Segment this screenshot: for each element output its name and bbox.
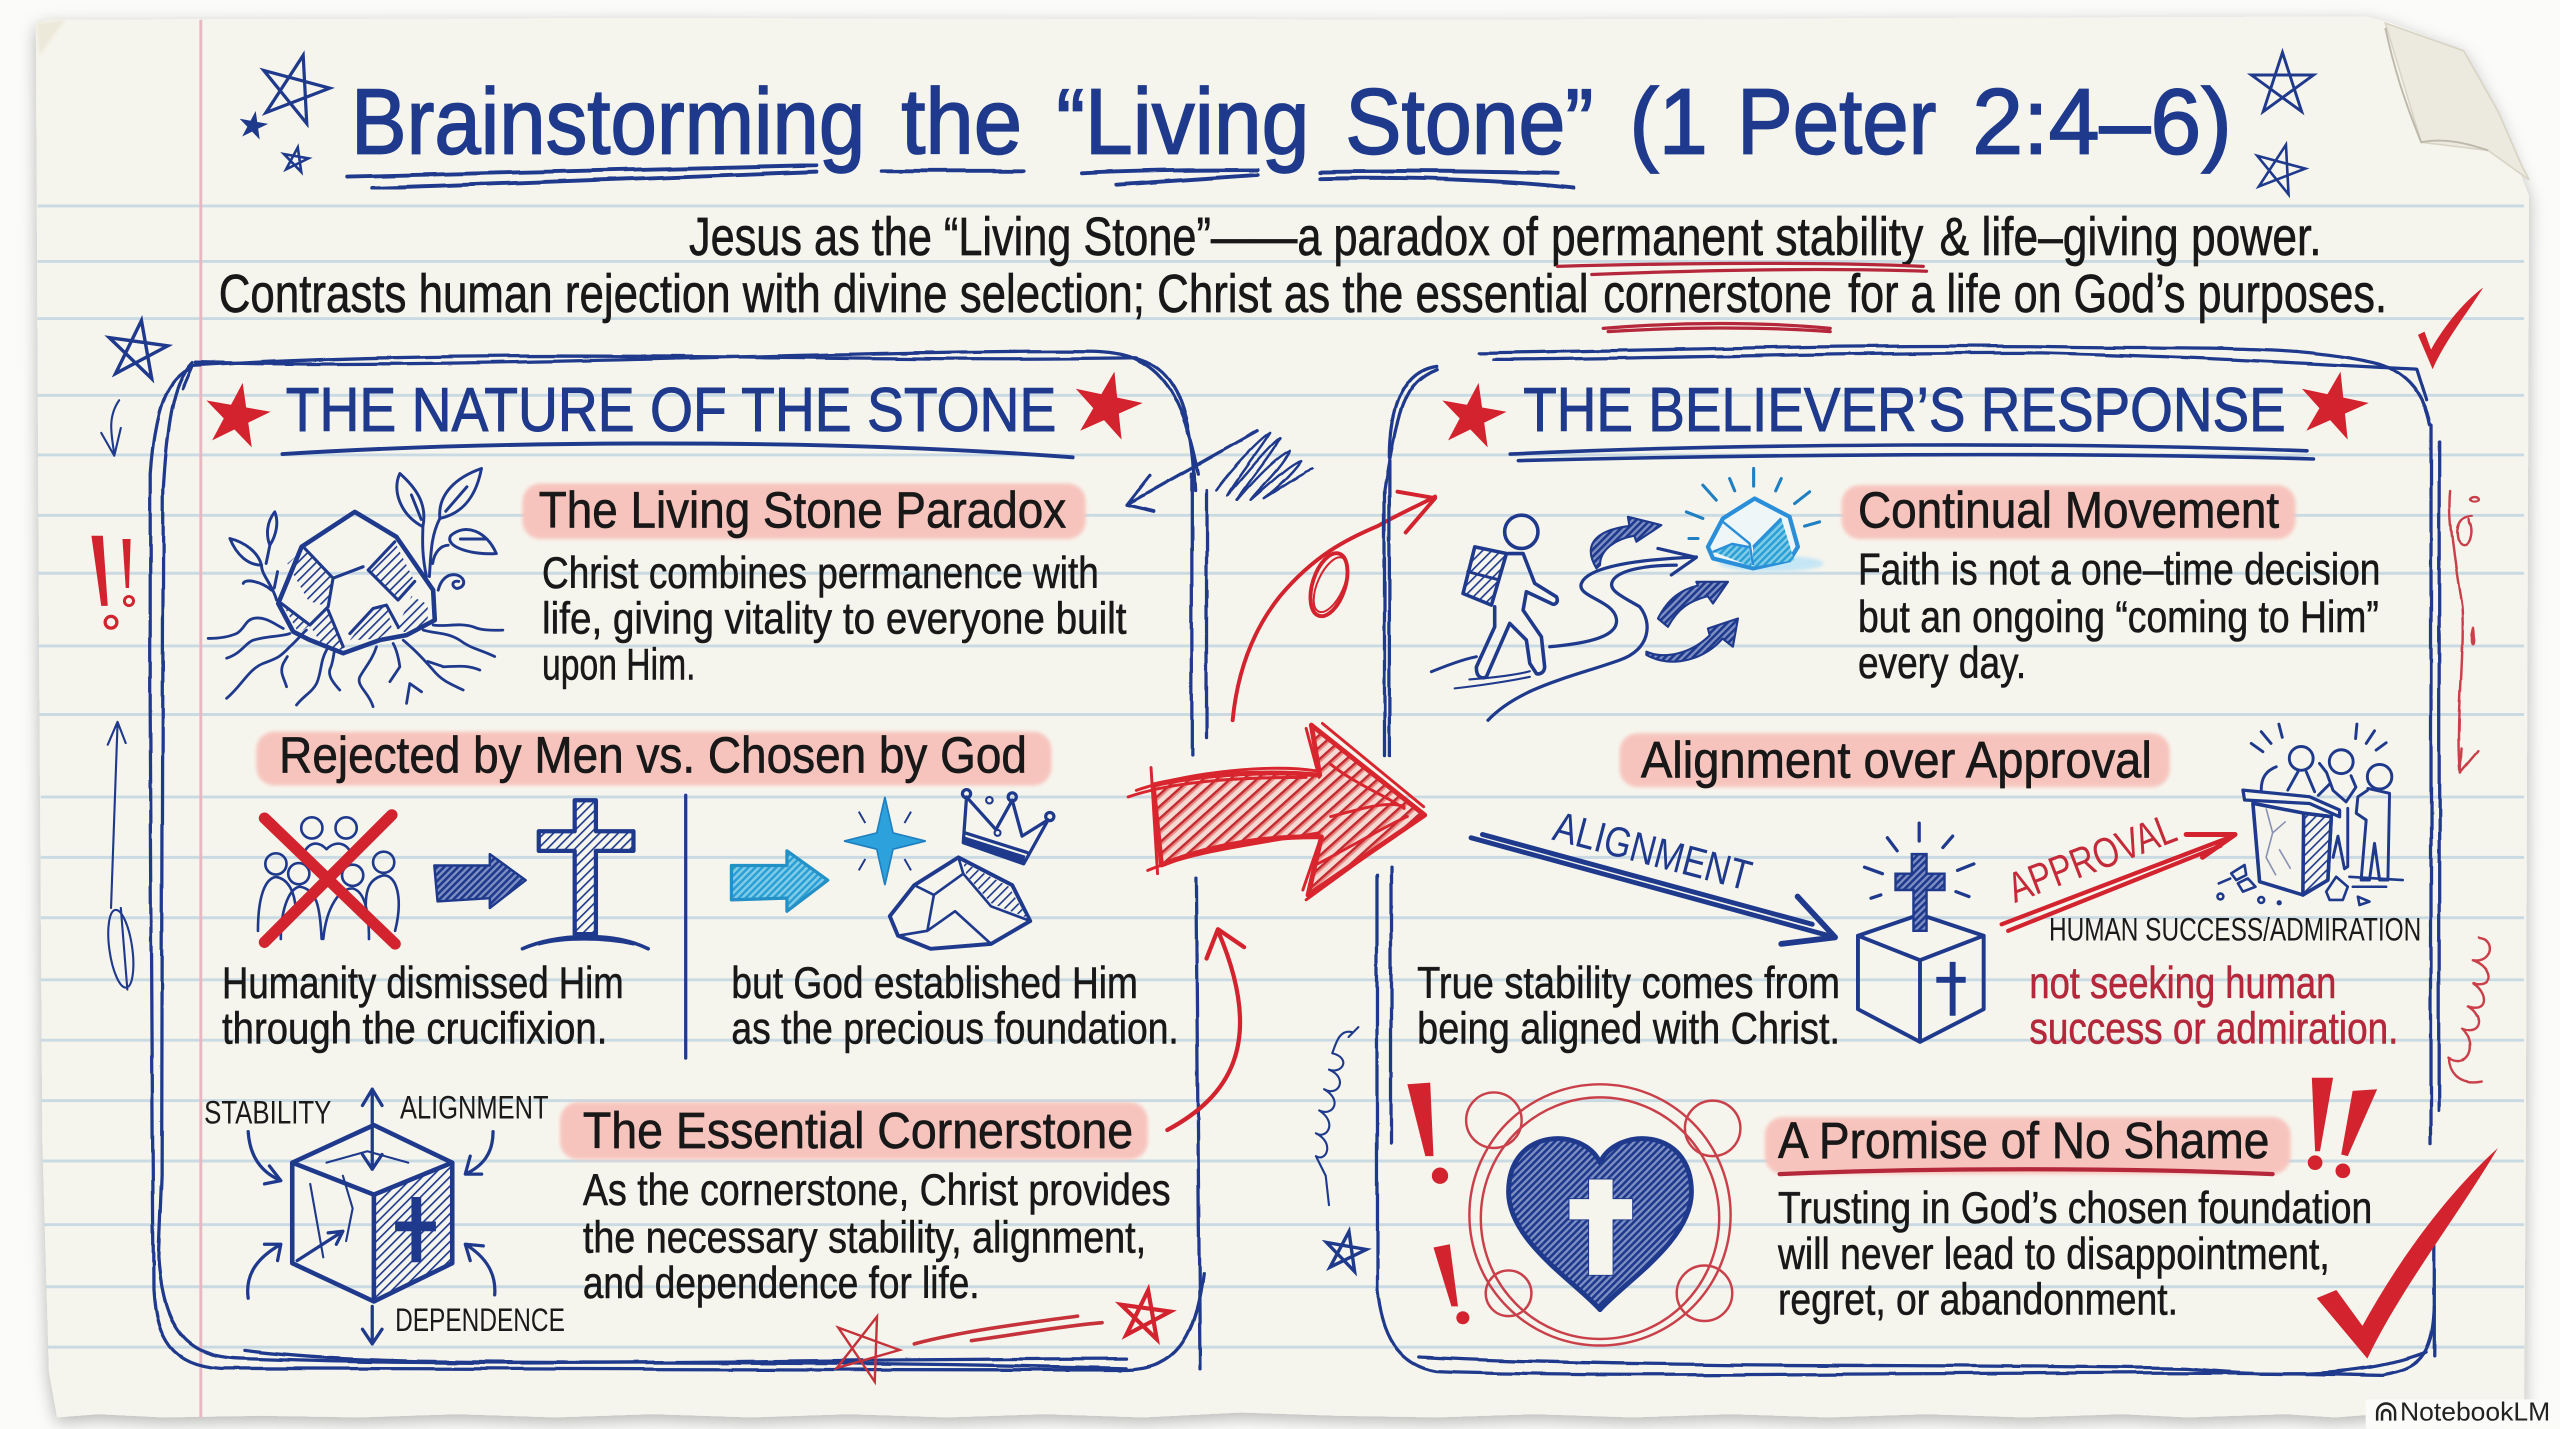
text: continual movement body: Faith is not a one–time decision: [1858, 546, 2380, 595]
arrow: blue pointer with scribble: [1127, 431, 1313, 511]
icon: heart with cross in red rings: [1466, 1084, 1740, 1346]
heading: rejected by men vs chosen by god: Rejected by Men vs. Chosen by God: [279, 726, 1027, 783]
heading: promise of no shame: A Promise of No Shame: [1778, 1112, 2269, 1169]
text: god established: but God established Him: [731, 959, 1138, 1008]
heading: essential cornerstone: The Essential Cornerstone: [583, 1102, 1133, 1159]
icon: crowned stone: [890, 790, 1054, 949]
text: humanity dismissed: Humanity dismissed Him: [222, 959, 624, 1008]
text: promise body: regret, or abandonment.: [1778, 1275, 2178, 1324]
title: “Living: [1056, 70, 1309, 174]
arrow: alignment with label: ALIGNMENT: [1549, 803, 1756, 899]
icon: crumbling podium and admiring crowd: [2217, 724, 2403, 905]
icon: walker with paths toward glowing stone: [1431, 468, 1824, 720]
text: not seeking human success: success or admiration.: [2029, 1004, 2398, 1053]
panel frame: nature of the stone: [150, 351, 1207, 1370]
icon: small red check mark: [2418, 288, 2483, 369]
doodle: blue squiggle and star between panels: [1316, 1027, 1369, 1273]
subtitle: & life–giving power.: [1940, 207, 2322, 267]
text: true stability: being aligned with Christ.: [1417, 1004, 1840, 1053]
title: Brainstorming: [351, 70, 865, 174]
text: god established: [731, 959, 1179, 1053]
text: continual movement body: but an ongoing “coming to Him”: [1858, 593, 2379, 642]
text: god established: as the precious foundation.: [731, 1004, 1179, 1053]
subtitle red underlines: [1558, 263, 1927, 332]
icon: rejected crowd crossed out: [258, 815, 399, 944]
subtitle: Jesus as the “Living Stone”——a paradox of: [689, 207, 1539, 267]
title: (1: [1629, 70, 1708, 174]
title: 2:4–6): [1972, 70, 2232, 174]
text: true stability: [1417, 959, 1840, 1053]
text: living stone paradox body: life, giving vitality to everyone built: [542, 595, 1127, 644]
icon: red exclamation marks: [1407, 1078, 2377, 1324]
icon: cornerstone cube with labelled arrows: [204, 1089, 565, 1344]
arrow: approval with label: APPROVAL: [2001, 804, 2183, 911]
icon: cornerstone cube with labelled arrows: DEPENDENCE: [395, 1301, 565, 1338]
icon: cornerstone cube with labelled arrows: STABILITY: [204, 1093, 332, 1130]
left margin doodles: [91, 316, 171, 990]
icon: cross: [522, 800, 648, 949]
icon: cube with cross: [1858, 823, 1984, 1042]
page curl top right: [2385, 23, 2529, 180]
arrow: red curved bottom: [1167, 929, 1244, 1130]
heading: continual movement: Continual Movement: [1858, 482, 2279, 539]
divider: [685, 795, 687, 1058]
subtitle: permanent stability: [1551, 207, 1923, 267]
text: promise body: [1777, 1184, 2372, 1324]
icon: cornerstone cube with labelled arrows: ALIGNMENT: [400, 1089, 549, 1126]
arrow: big red transition arrow: [1128, 723, 1425, 900]
subtitle: for a life on God’s purposes.: [1848, 264, 2387, 324]
text: cornerstone body: As the cornerstone, Christ provides: [583, 1166, 1171, 1215]
title stars: [239, 46, 2314, 197]
subtitle: [219, 207, 2387, 324]
heading: alignment over approval: Alignment over Approval: [1641, 731, 2152, 788]
text: living stone paradox body: [542, 549, 1127, 689]
panel heading: the nature of the stone: THE NATURE OF THE STONE: [286, 376, 1056, 445]
arrow: alignment with label: [1471, 803, 1835, 944]
label: human success: HUMAN SUCCESS/ADMIRATION: [2049, 911, 2421, 948]
text: living stone paradox body: Christ combines permanence with: [542, 549, 1099, 598]
panel heading: the nature of the stone: [202, 366, 1146, 457]
text: cornerstone body: [583, 1166, 1171, 1308]
text: promise body: will never lead to disappointment,: [1777, 1230, 2330, 1279]
doodle: right margin red squiggles: [2449, 490, 2489, 1082]
text: cornerstone body: the necessary stability, alignment,: [583, 1213, 1146, 1262]
text: not seeking human success: not seeking human: [2029, 959, 2336, 1008]
panel heading: the believer's response: [1437, 366, 2372, 461]
text: humanity dismissed: [222, 959, 624, 1053]
text: not seeking human success: [2029, 959, 2398, 1053]
subtitle: Contrasts human rejection with divine selection; Christ as the essential: [219, 264, 1589, 324]
text: living stone paradox body: upon Him.: [542, 640, 696, 689]
section highlight: living stone paradox: The Living Stone Paradox: [539, 482, 1066, 539]
decorative red stars bottom left panel: [825, 1287, 1173, 1386]
icon: stone with plants and roots: [208, 468, 503, 707]
icon: blue sparkle: [844, 797, 926, 885]
arrow: light blue hatched: [731, 851, 828, 911]
text: cornerstone body: and dependence for life.: [583, 1259, 980, 1308]
text: promise body: Trusting in God’s chosen foundation: [1778, 1184, 2372, 1233]
text: continual movement body: [1858, 546, 2380, 688]
NotebookLM watermark: NotebookLM: [2400, 1397, 2550, 1427]
text: continual movement body: every day.: [1858, 639, 2026, 688]
title underlines: [348, 165, 1574, 188]
panel frame: believer's response: [1377, 346, 2439, 1375]
text: humanity dismissed: through the crucifixion.: [222, 1004, 607, 1053]
title: the: [901, 70, 1022, 174]
arrow: red curved top with loop: [1233, 492, 1435, 720]
text: true stability: True stability comes from: [1417, 959, 1840, 1008]
arrow: dark blue hatched: [434, 854, 526, 908]
title: Peter: [1737, 70, 1936, 174]
title: [351, 70, 2232, 174]
icon: large red check mark: [2317, 1148, 2498, 1359]
title: Stone”: [1345, 70, 1593, 174]
panel heading: the believer's response: THE BELIEVER’S RESPONSE: [1523, 376, 2286, 445]
subtitle: cornerstone: [1603, 264, 1832, 324]
